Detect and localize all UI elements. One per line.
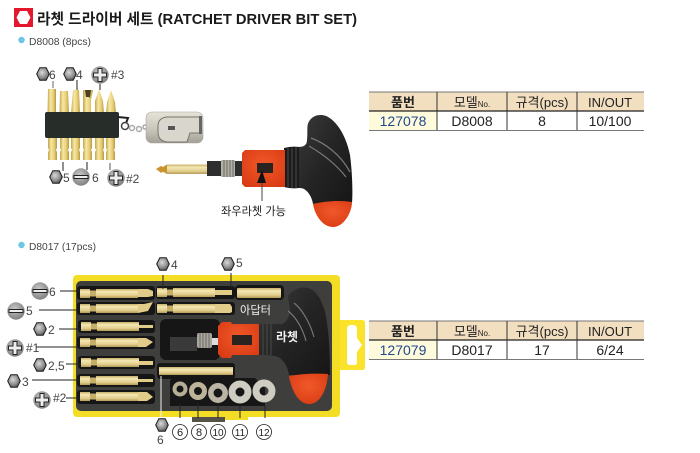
black T handle [298,115,352,204]
driver bit [156,164,208,174]
tray driver orange end [289,374,328,404]
bit labels D8008: 4 [76,68,83,82]
silver clip [146,112,203,143]
tray bit labels: 2 [48,323,55,337]
table: D8008: D8008 [451,113,493,129]
gold bits right column [157,288,281,375]
tray leader lines [32,273,265,419]
ratchet label: 라쳇 [276,330,298,344]
tray bit labels [6,256,243,447]
table: D8008: 규격(pcs) [516,95,568,110]
callout: ratchet note: 좌우라쳇 가능 [221,205,286,218]
gold bits [48,89,116,160]
hanger tab [338,320,365,370]
table: D8008: 10/100 [589,113,632,129]
table: D8017: IN/OUT [588,324,632,339]
tray driver chuck [170,333,219,351]
table: D8017: 17 [534,342,550,358]
socket size labels: 8 [196,427,202,439]
T-handle ratchet driver D8008 [156,115,352,227]
socket size labels: 10 [212,428,224,439]
bit labels D8008: 6 [49,68,56,82]
table: D8008: 127078 [380,113,427,129]
bit holder set D8008 [45,89,203,160]
bit labels D8008: #2 [126,172,140,186]
table: D8017: 품번 [391,324,415,339]
table: D8008: 8 [538,113,546,129]
sockets [174,383,272,400]
tray bit labels: 3 [22,375,29,389]
socket size labels: 11 [235,428,246,439]
table: D8017 [369,321,644,360]
chuck [207,160,242,177]
title [14,8,357,28]
black holder [45,112,119,138]
table: D8017: 규격(pcs) [516,324,568,339]
table: D8017: D8017 [451,342,493,358]
tray bit labels: 6 [49,285,56,299]
tray driver [170,287,330,404]
tray bit labels: #2 [53,391,67,405]
section label: D8017: D8017 (17pcs) [29,241,96,253]
header row [369,321,644,340]
bit labels D8008: #3 [111,68,125,82]
tray bit labels: 4 [171,258,178,272]
icon: hex title mark [14,8,33,27]
table: D8017: 127079 [380,342,427,358]
table: D8008 [369,92,644,130]
yellow tray D8017 [73,275,340,422]
gold bits left column [80,289,153,401]
tray compartments [77,285,284,406]
section label: D8008: D8008 (8pcs) [29,36,91,48]
bit labels D8008: 6 [92,171,99,185]
tray adapter text: 아답터 [240,304,271,317]
heading text: 라쳇 드라이버 세트 (RATCHET DRIVER BIT SET) [37,11,357,28]
callout: ratchet note [221,170,286,218]
tray bit labels: #1 [26,341,40,355]
table: D8008: IN/OUT [588,95,632,110]
table: D8008: 품번 [391,95,415,110]
header row [369,92,644,111]
tray bit labels: 6 [157,433,164,447]
table: D8017: 6/24 [596,342,624,358]
socket size labels: 12 [258,428,270,439]
table: D8008: 모델No. [454,95,490,110]
tray bit labels: 5 [236,256,243,270]
socket size labels: 6 [177,427,183,439]
socket size labels [172,424,272,440]
key ring [118,117,147,132]
orange body [242,150,285,187]
tray driver orange body [218,322,259,358]
bit labels D8008 [37,66,140,187]
black collar [284,147,299,188]
orange end cap [313,201,352,227]
tray bit labels: 5 [26,304,33,318]
ratchet switch [257,163,273,173]
bit labels D8008: 5 [63,171,70,185]
table: D8017: 모델No. [454,324,490,339]
tray bit labels: 2,5 [48,359,65,373]
